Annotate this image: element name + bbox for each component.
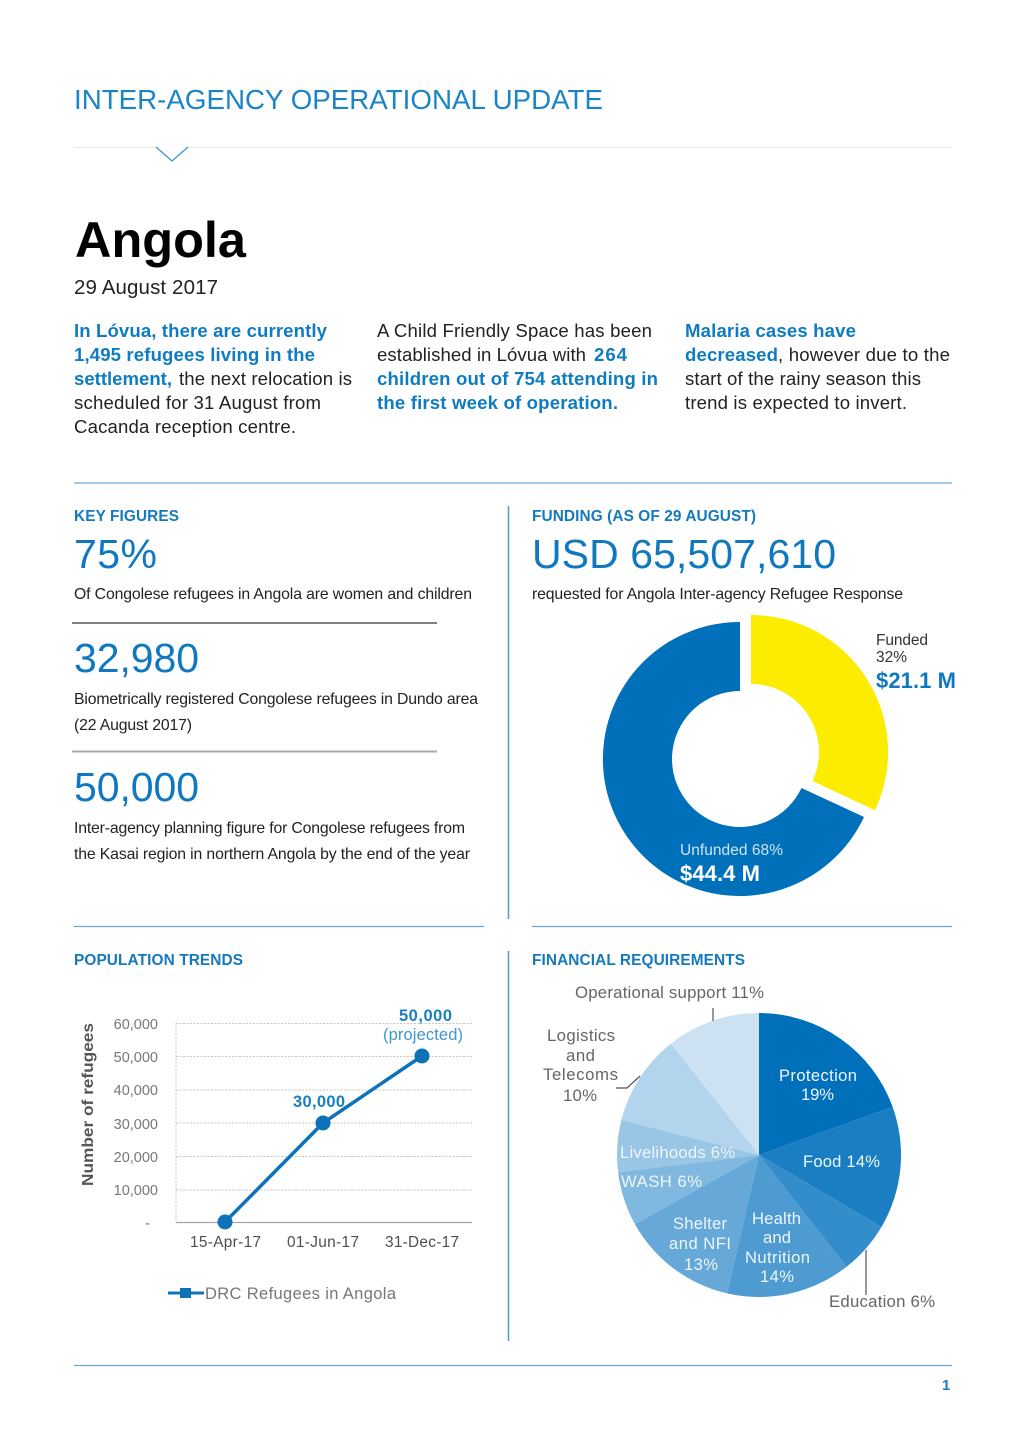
slice labels: Livelihoods 6% — [620, 1143, 735, 1162]
date: 29 August 2017 — [74, 276, 218, 299]
outside labels: Telecoms — [543, 1065, 618, 1084]
x axis labels: 15-Apr-17 — [190, 1234, 261, 1251]
heading: key figures: KEY FIGURES — [74, 508, 179, 525]
panel: key figures — [72, 508, 478, 863]
x axis labels: 01-Jun-17 — [287, 1234, 359, 1251]
key figure: 75 percent — [74, 531, 472, 603]
data labels: (projected) — [383, 1026, 463, 1044]
segment: funded 32 percent — [751, 615, 888, 810]
slice labels: 19% — [801, 1085, 834, 1104]
header: document series title: INTER-AGENCY OPERATIONAL UPDATE — [74, 84, 603, 115]
panel: funding — [532, 508, 956, 896]
data line — [218, 1048, 430, 1230]
text block: malaria: Malaria cases have — [685, 320, 856, 341]
key figure: 32,980: Biometrically registered Congolese refugees in Dundo area — [74, 691, 478, 708]
axis title: Number of refugees — [80, 1023, 97, 1186]
key figure: 50,000: 50,000 — [74, 764, 199, 810]
outside labels — [543, 983, 935, 1311]
slice labels: Shelter — [673, 1214, 727, 1233]
slice labels: Food 14% — [803, 1152, 880, 1171]
text block: malaria: start of the rainy season this — [685, 368, 921, 389]
outside labels: Education 6% — [829, 1292, 935, 1311]
panel: financial requirements — [532, 952, 935, 1311]
x axis labels — [190, 1234, 459, 1251]
text block: malaria: decreased — [685, 344, 778, 365]
text block: malaria — [685, 320, 950, 413]
heading: population trends: POPULATION TRENDS — [74, 952, 243, 969]
icon: header chevron — [156, 147, 188, 161]
data labels: 50,000 — [399, 1007, 452, 1025]
label: unfunded: $44.4 M — [680, 861, 760, 886]
key figure: 32,980: 32,980 — [74, 635, 199, 681]
label: funded: 32% — [876, 649, 907, 666]
data labels: 30,000 — [293, 1093, 345, 1111]
heading: financial requirements: FINANCIAL REQUIREMENTS — [532, 952, 745, 969]
text block: Lovua settlement: 1,495 refugees living in the — [74, 344, 315, 365]
line chart: refugee population — [80, 1007, 472, 1303]
key figure: 32,980: (22 August 2017) — [74, 717, 192, 734]
key figure: 50,000: Inter-agency planning figure for Congolese refugees from — [74, 820, 465, 837]
heading: funding: FUNDING (AS OF 29 AUGUST) — [532, 508, 756, 525]
text block: Lovua settlement — [74, 320, 352, 437]
slice labels: 13% — [684, 1255, 718, 1274]
slice labels: WASH 6% — [621, 1172, 702, 1191]
page number: 1 — [942, 1377, 950, 1394]
slice labels: Nutrition — [745, 1248, 810, 1267]
label: unfunded — [680, 842, 783, 886]
label: funded — [876, 632, 956, 693]
key figure: 75 percent: 75% — [74, 531, 157, 577]
key figure: 75 percent: Of Congolese refugees in Angola are women and children — [74, 586, 472, 603]
text block: child friendly space: 264 — [594, 344, 628, 365]
text block: child friendly space: established in Lóvua with — [377, 344, 586, 365]
slice labels: and NFI — [669, 1234, 731, 1253]
text block: Lovua settlement: scheduled for 31 August from — [74, 392, 321, 413]
y axis labels: 10,000 — [114, 1183, 158, 1199]
outside labels: Operational support 11% — [575, 983, 764, 1002]
slice labels: Protection — [779, 1066, 857, 1085]
y axis labels: 60,000 — [114, 1017, 158, 1033]
funding total: USD 65,507,610 — [532, 531, 836, 577]
slice labels: 14% — [760, 1267, 794, 1286]
text block: child friendly space: children out of 754 attending in — [377, 368, 658, 389]
y axis labels: - — [145, 1216, 150, 1232]
y axis labels: 50,000 — [114, 1050, 158, 1066]
y axis labels: 20,000 — [114, 1150, 158, 1166]
text block: malaria: , however due to the — [778, 344, 950, 365]
key figure: 50,000 — [74, 764, 470, 863]
label: funded: Funded — [876, 632, 928, 649]
x axis labels: 31-Dec-17 — [385, 1234, 459, 1251]
y axis labels: 30,000 — [114, 1117, 158, 1133]
key figure: 32,980 — [74, 635, 478, 734]
y axis labels — [114, 1017, 158, 1232]
slice labels — [620, 1066, 880, 1286]
donut chart: funded vs unfunded — [603, 615, 956, 896]
pie chart: financial requirements by sector — [543, 983, 935, 1311]
text block: Lovua settlement: the next relocation is — [179, 368, 352, 389]
title: country name: Angola — [75, 212, 247, 268]
funding description: requested for Angola Inter-agency Refugee Response — [532, 586, 903, 603]
slice labels: and — [763, 1228, 791, 1247]
data labels — [293, 1007, 463, 1111]
key figure: 50,000: the Kasai region in northern Angola by the end of the year — [74, 846, 470, 863]
text block: malaria: trend is expected to invert. — [685, 392, 907, 413]
text block: child friendly space: A Child Friendly Space has been — [377, 320, 652, 341]
slice labels: Health — [752, 1209, 801, 1228]
label: unfunded: Unfunded 68% — [680, 842, 783, 859]
label: funded: $21.1 M — [876, 668, 956, 693]
legend: DRC Refugees in Angola — [205, 1285, 397, 1303]
panel: population trends — [74, 952, 472, 1303]
outside labels: Logistics — [547, 1026, 615, 1045]
outside labels: 10% — [563, 1086, 597, 1105]
outside labels: and — [566, 1046, 595, 1065]
segment: unfunded 68 percent — [603, 622, 864, 896]
y axis labels: 40,000 — [114, 1083, 158, 1099]
text block: Lovua settlement: In Lóvua, there are currently — [74, 320, 328, 341]
text block: child friendly space — [377, 320, 658, 413]
text block: Lovua settlement: Cacanda reception centre. — [74, 416, 296, 437]
text block: Lovua settlement: settlement, — [74, 368, 172, 389]
leader lines — [616, 1008, 866, 1295]
text block: child friendly space: the first week of operation. — [377, 392, 618, 413]
